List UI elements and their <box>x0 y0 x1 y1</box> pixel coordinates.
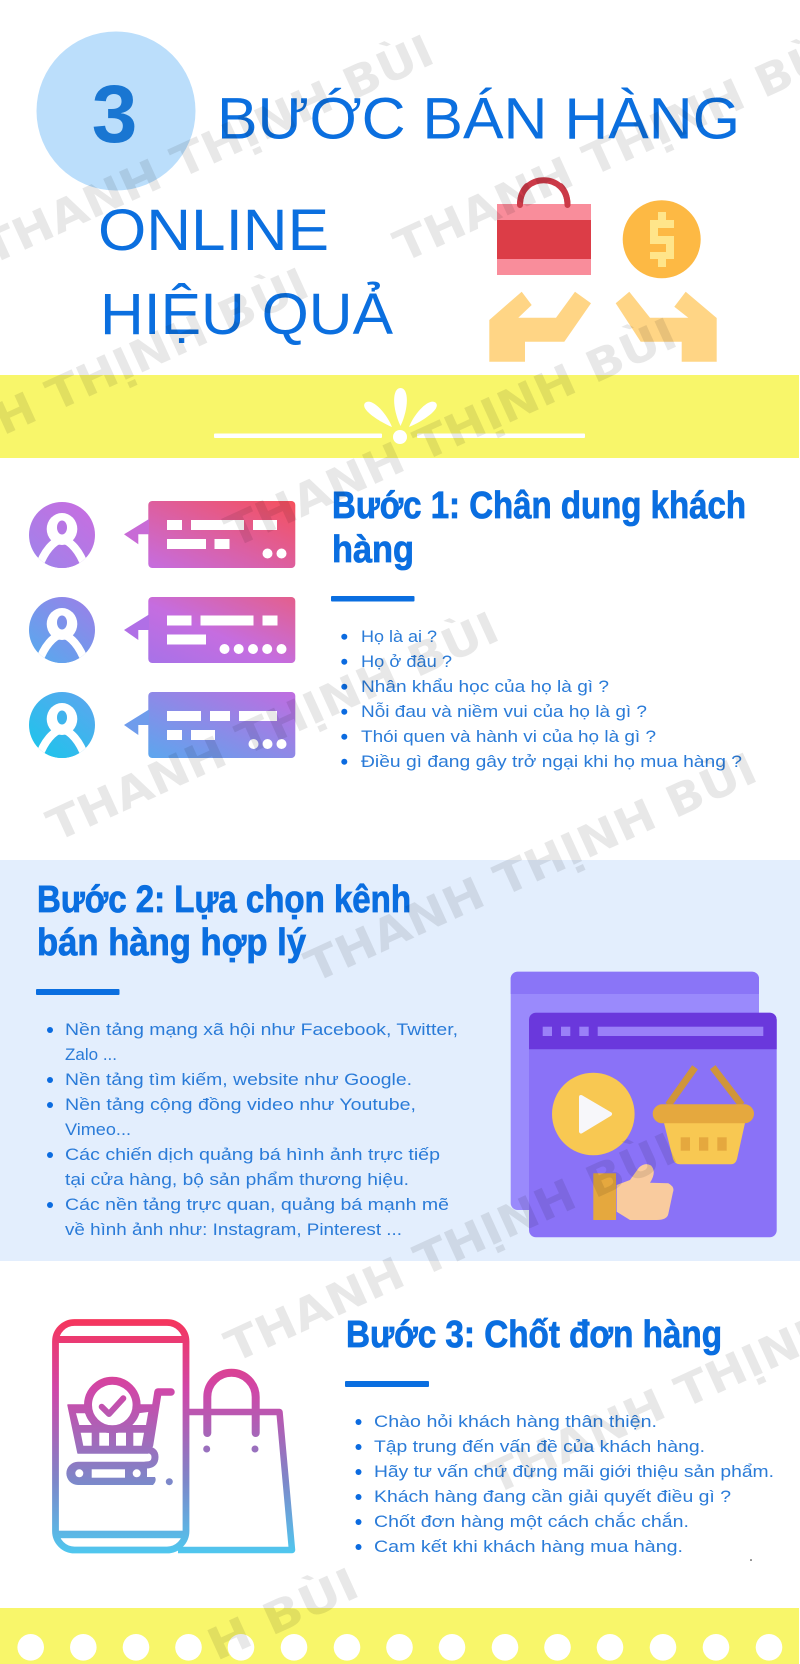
bullet list: closing tips: Khách hàng đang cần giải quyết điều gì ? <box>374 1487 731 1506</box>
header: title and money icon <box>36 32 740 362</box>
bullet list: step 1 questions: Điều gì đang gây trở ngại khi họ mua hàng ? <box>361 752 742 771</box>
icon: customer avatars and speech bubbles <box>29 501 295 759</box>
bullet list: closing tips <box>356 1412 774 1556</box>
bullet list: channels: Nền tảng tìm kiếm, website như Google. <box>65 1070 412 1089</box>
bullet list: step 1 questions <box>341 627 742 771</box>
bullet list: channels: Các nền tảng trực quan, quảng bá mạnh mẽ <box>65 1195 449 1214</box>
speech bubble 3 <box>124 692 295 758</box>
bullet list: channels: Zalo ... <box>65 1045 117 1064</box>
heading: step 2: bán hàng hợp lý <box>37 922 306 964</box>
avatar 1 <box>29 502 95 569</box>
title line: ONLINE: ONLINE <box>98 198 329 263</box>
watermarks: THANH THỊNH BÙI <box>297 742 765 993</box>
phone <box>56 1322 186 1550</box>
bullet list: channels: về hình ảnh như: Instagram, Pinterest ... <box>65 1220 402 1239</box>
bullet list: step 1 questions: Họ ở đâu ? <box>361 652 452 671</box>
bullet list: channels <box>47 1020 458 1239</box>
footer band with white dots <box>0 1608 799 1664</box>
back window <box>511 972 759 1210</box>
bullet list: step 1 questions: Nhân khẩu học của họ là gì ? <box>361 677 609 696</box>
watermarks: THANH THỊNH BÙI <box>39 601 507 852</box>
bullet list: channels: Vimeo... <box>65 1120 131 1139</box>
thumbs up <box>593 1164 673 1220</box>
panel: step 1 customer portrait <box>29 485 746 771</box>
bullet list: closing tips: Chào hỏi khách hàng thân thiện. <box>374 1412 657 1431</box>
bullet list: closing tips: Tập trung đến vấn đề của khách hàng. <box>374 1437 705 1456</box>
heading: step 1: Bước 1: Chân dung khách <box>332 485 746 527</box>
title line: HIỆU QUẢ: HIỆU QUẢ <box>100 282 393 347</box>
bullet list: step 1 questions: Thói quen và hành vi của họ là gì ? <box>361 727 656 746</box>
speech bubble 2 <box>124 597 295 663</box>
badge circle with number 3 <box>36 32 196 190</box>
accent rule <box>36 989 120 995</box>
stray dot <box>750 1559 752 1561</box>
bullet list: channels: Các chiến dịch quảng bá hình ảnh trực tiếp <box>65 1145 440 1164</box>
shopping cart <box>66 1381 173 1485</box>
watermarks: THANH THỊNH BÙI <box>217 307 685 558</box>
icon: right hand <box>616 292 717 362</box>
bullet list: channels: Nền tảng mạng xã hội như Facebook, Twitter, <box>65 1020 458 1039</box>
panel: step 2 sales channels <box>0 860 800 1261</box>
bullet list: step 1 questions: Nỗi đau và niềm vui của họ là gì ? <box>361 702 647 721</box>
yellow divider band with flower <box>0 375 799 458</box>
front window <box>529 1013 777 1237</box>
speech bubble 1 <box>124 501 295 568</box>
accent rule <box>331 596 414 602</box>
icon: phone, cart and shopping bag <box>56 1322 292 1550</box>
badge circle with number 3: 3 <box>92 69 137 160</box>
icon: left hand <box>489 292 591 362</box>
heading: step 2: Bước 2: Lựa chọn kênh <box>37 879 411 921</box>
panel background <box>0 860 800 1261</box>
accent rule <box>345 1381 429 1387</box>
watermarks: THANH THỊNH BÙI <box>217 1122 685 1373</box>
bullet list: channels: tại cửa hàng, bộ sản phẩm thương hiệu. <box>65 1170 409 1189</box>
title line: BƯỚC BÁN HÀNG: BƯỚC BÁN HÀNG <box>217 86 740 152</box>
avatar 3 <box>29 692 95 759</box>
heading: step 1: hàng <box>332 529 414 571</box>
bullet list: step 1 questions: Họ là ai ? <box>361 627 437 646</box>
bullet list: closing tips: Hãy tư vấn chứ đừng mãi giới thiệu sản phẩm. <box>374 1462 774 1481</box>
panel: step 3 closing the order <box>56 1314 774 1561</box>
heading: step 1 <box>332 485 746 571</box>
bullet list: closing tips: Cam kết khi khách hàng mua hàng. <box>374 1537 683 1556</box>
icon: browser windows with video, basket and like <box>511 972 777 1237</box>
shopping basket <box>653 1067 754 1164</box>
icon: dollar coin <box>623 200 701 278</box>
icon: shopping bag <box>497 180 591 275</box>
heading: step 2 <box>37 879 411 964</box>
bullet list: channels: Nền tảng cộng đồng video như Youtube, <box>65 1095 416 1114</box>
shopping bag <box>178 1373 292 1550</box>
avatar 2 <box>29 597 95 664</box>
heading: step 3: Bước 3: Chốt đơn hàng <box>346 1314 722 1356</box>
play button <box>552 1073 635 1155</box>
bullet list: closing tips: Chốt đơn hàng một cách chắc chắn. <box>374 1512 689 1531</box>
